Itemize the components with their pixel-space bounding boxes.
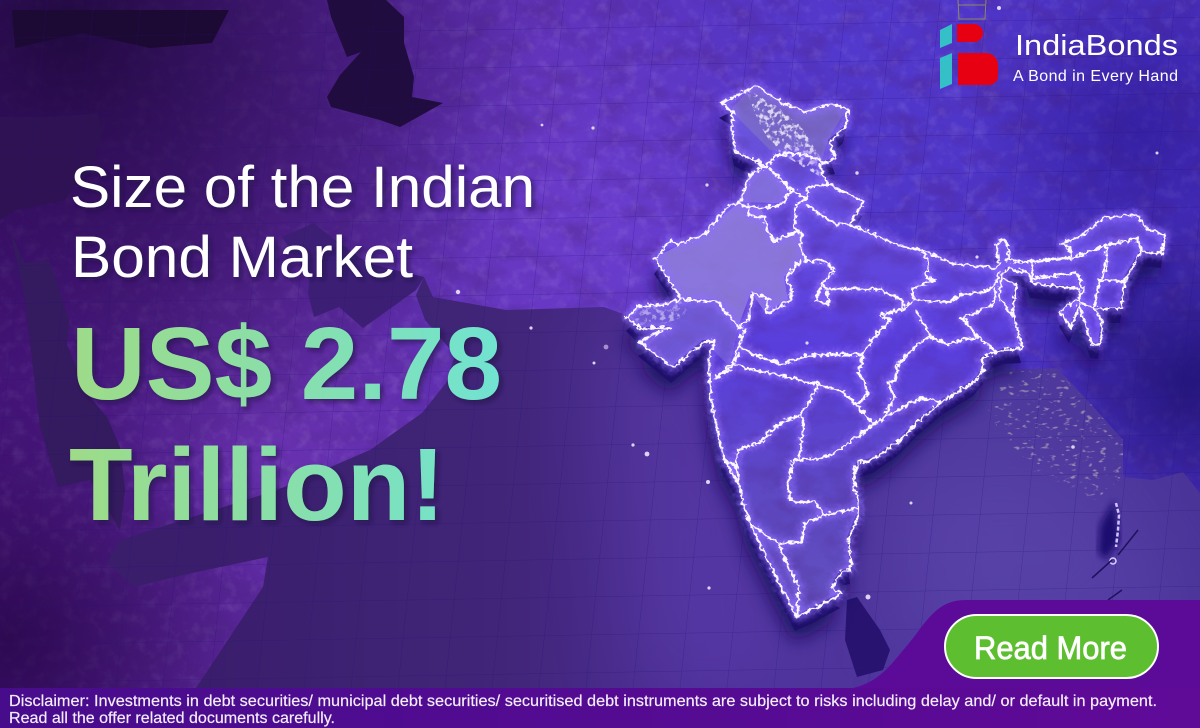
disclaimer bar — [0, 688, 1200, 728]
logo wordmark: IndiaBonds — [1015, 30, 1178, 62]
title: Bond Market — [71, 225, 413, 290]
disclaimer text: Read all the offer related documents carefully. — [9, 710, 335, 727]
Andaman and Nicobar islands — [1092, 500, 1138, 600]
borders glow — [626, 84, 1163, 615]
Sri Lanka — [845, 597, 890, 677]
title — [70, 155, 535, 290]
states fill — [620, 80, 1180, 620]
sea: Arabian Sea and Bay of Bengal — [107, 277, 1200, 690]
headline figure: Trillion! — [69, 427, 445, 542]
map: extruded shadow — [624, 100, 1163, 641]
scattered light points — [456, 6, 1158, 600]
logo tagline: A Bond in Every Hand — [1013, 68, 1178, 85]
headline figure — [69, 306, 502, 542]
title: Size of the Indian — [70, 155, 535, 220]
seas: Black Sea, Caspian, Mediterranean, Red Sea, Persian Gulf — [0, 0, 443, 530]
logo: IndiaBonds — [940, 0, 1178, 89]
button: Read More: Read More — [974, 630, 1127, 666]
map of India with glowing state borders — [620, 80, 1180, 620]
disclaimer text — [9, 693, 1157, 727]
disclaimer text: Disclaimer: Investments in debt securities/ municipal debt securities/ securitised debt instruments are subject to risks including delay and/ or default in payment. — [9, 693, 1157, 710]
headline figure: US$ 2.78 — [71, 306, 502, 421]
logo mark — [940, 0, 998, 89]
borders line — [626, 84, 1163, 615]
call-to-action panel — [853, 600, 1200, 690]
sea: light beam and glints — [608, 359, 1123, 667]
button: Read More — [945, 615, 1158, 678]
